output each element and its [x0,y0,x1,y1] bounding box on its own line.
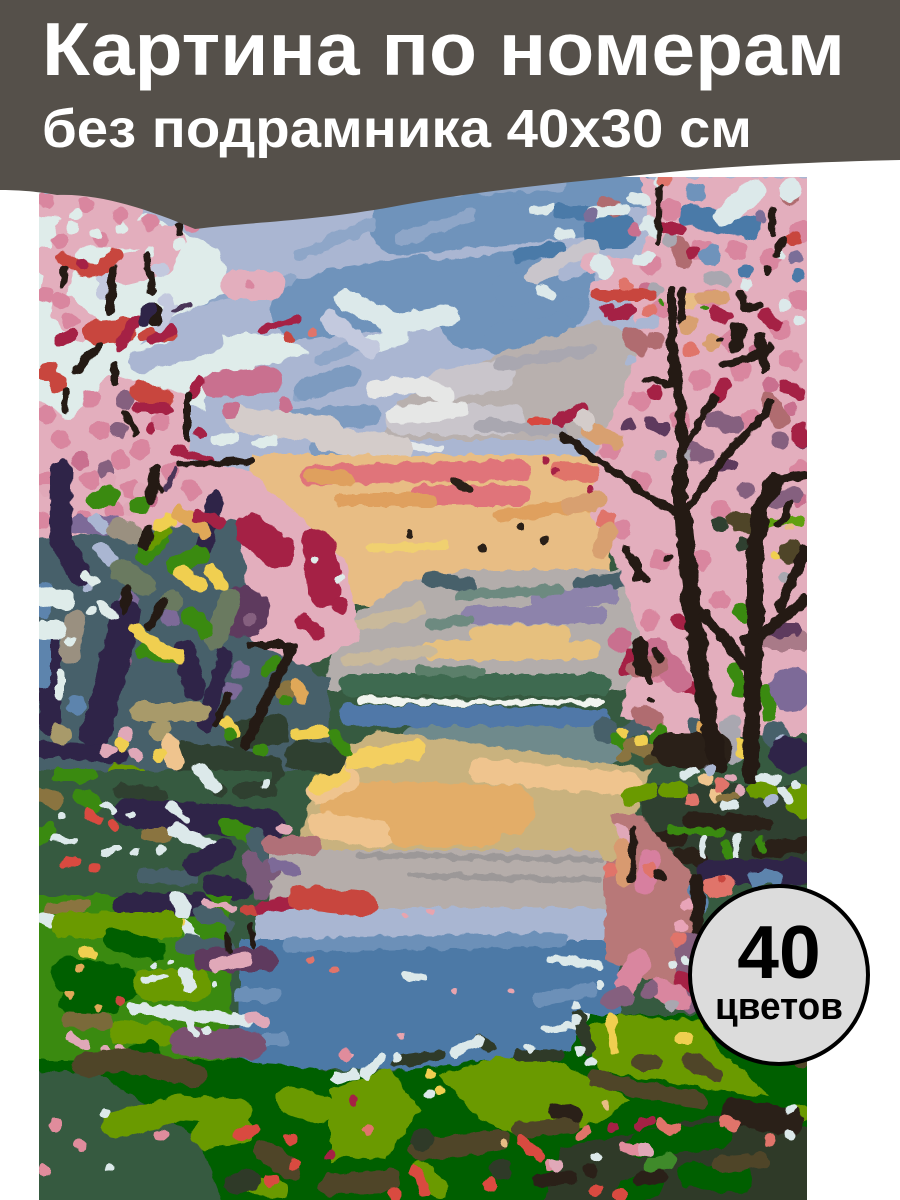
title: Картина по номерам [42,7,845,91]
left tree trunks [62,226,295,745]
right tree: main pink canopy [530,393,801,760]
right bank [570,770,820,1020]
badge number: 40 [737,910,821,994]
left bank [30,770,365,1065]
badge label: цветов [715,986,843,1028]
left trees: pink canopy [30,190,360,670]
badge: 40 colours [690,886,868,1064]
painting: spring lake with blossoming trees [39,177,807,1200]
sunset clouds [250,455,610,605]
right tree trunks [562,187,805,775]
subtitle: без подрамника 40х30 см [42,99,752,159]
distant mountains [320,570,650,690]
left trees: shaded undergrowth [30,470,350,775]
header banner [0,0,900,229]
foreground meadow [30,1015,820,1200]
sky [43,177,807,471]
far shore and treeline [350,670,610,745]
lake: grey and blue water [240,850,620,1070]
right tree: upper canopy with sky gaps [520,177,820,735]
lake: warm reflection [295,730,650,865]
